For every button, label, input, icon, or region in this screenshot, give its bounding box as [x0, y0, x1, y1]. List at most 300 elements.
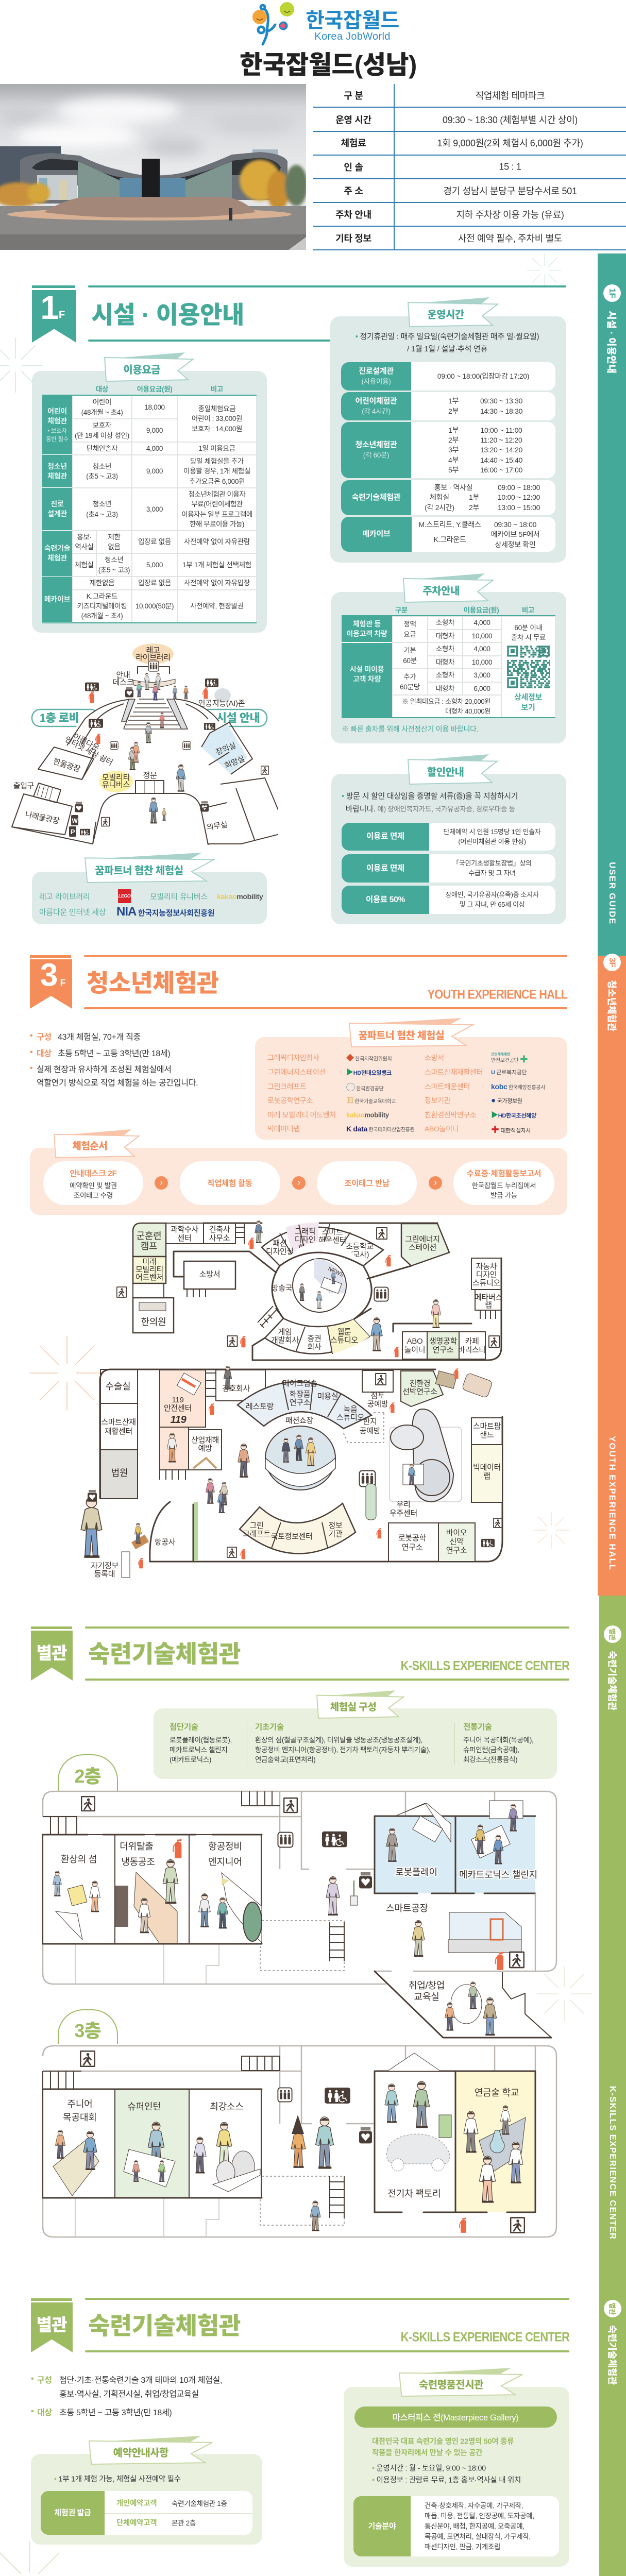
room: 자동차 디자인 스튜디오: 디자인: [476, 1270, 497, 1279]
panel: 운영시간 (hours): [330, 297, 566, 563]
logo: LEGO: [118, 889, 131, 903]
fan rooms: top arc: 회사: [298, 1244, 312, 1252]
partner list: 미래 모빌리티 어드벤처: [267, 1111, 336, 1119]
text block: youth hall overview: 초등 5학년 ~ 고등 3학년(만 18세): [58, 1049, 170, 1058]
fee table: 사전예약 없이 자유입장: [184, 579, 250, 587]
column: 첨단기술: 로봇플레이(협동로봇),: [170, 1736, 232, 1744]
room: 더위탈출 냉동공조: [115, 1835, 189, 1944]
panel: 운영시간 (hours): 메카이브 5F에서: [491, 530, 539, 538]
floor map: 3F lower wing: [80, 1366, 503, 1579]
panel: 운영시간 (hours): 16:00 ~ 17:00: [480, 466, 522, 474]
panel: 운영시간 (hours): 09:30 ~ 13:30: [480, 397, 522, 405]
partner list: 정보기관: [425, 1096, 450, 1105]
column: 기초기술: [255, 1723, 431, 1764]
room: 항공정비 엔지니어: 항공정비: [208, 1841, 242, 1852]
partner list: 산업재해예방: [491, 1053, 510, 1056]
parking table: 정액: [403, 620, 416, 628]
row: 청소년체험관: [341, 422, 555, 478]
english subtitle: K-SKILLS EXPERIENCE CENTER: [400, 2330, 569, 2344]
row: 숙련기술체험관: 숙련기술체험관: [352, 493, 400, 502]
ribbon badge: 3F: F: [60, 978, 65, 988]
section title: 숙련기술체험관: [88, 2312, 241, 2339]
rooms: 스마트팜랜드 and 빅데이터랩: 랜드: [480, 1431, 494, 1439]
icons: [81, 1797, 347, 1848]
panel: 예약안내사항: [31, 2436, 262, 2545]
rooms: bottom right: [402, 1332, 486, 1359]
fee table: 청소년: [105, 556, 124, 564]
fee table: 단체인솔자: [87, 445, 117, 452]
panel: 꿈파트너 협찬 체험실 (1F): [32, 853, 267, 924]
fan rooms: bottom arc: 게임: [278, 1328, 292, 1336]
room: 119 안전센터: 119: [172, 1396, 184, 1404]
rooms: bottom right: 놀이터: [404, 1346, 425, 1354]
rooms: 전기차 팩토리 and 연금술 학교: [375, 2053, 535, 2212]
rooms: bottom right: 카페: [465, 1337, 479, 1346]
step 4: 한국잡월드 누리집에서: [472, 1182, 536, 1190]
sidebar: 1F user guide tab: 1F: [607, 288, 617, 298]
panel: 운영시간 (hours): 체험실: [430, 493, 449, 501]
fee table: 4,000: [146, 445, 163, 452]
text block: youth hall overview: •: [30, 1031, 32, 1040]
panel: 예약안내사항: 본관 2층: [172, 2519, 196, 2527]
box: 기술분야: [353, 2496, 559, 2556]
room: 환상의 섬: 환상의 섬: [61, 1854, 97, 1865]
fee table: 역사실: [75, 543, 94, 551]
ticket table: [41, 2491, 252, 2535]
parking table: 10,000: [472, 632, 492, 640]
room: 건축사사무소: 건축사: [209, 1225, 230, 1234]
stairs: [43, 2056, 280, 2089]
info table: 경기 성남시 분당구 분당수서로 501: [443, 186, 577, 196]
english subtitle: K-SKILLS EXPERIENCE CENTER: [400, 1659, 569, 1673]
panel: 운영시간 (hours): 10:00 ~ 12:00: [498, 493, 540, 501]
panel: 숙련명품전시관: 대한민국 대표 숙련기술 명인 22명의 50여 종류: [372, 2438, 514, 2446]
panel: 주차안내 (parking): 구분: [395, 606, 408, 614]
info table: 체험료: [341, 138, 366, 148]
information desk: 데스크: [113, 678, 133, 687]
fee table: 홍보·: [77, 533, 92, 541]
ribbon heading: 이용요금: [104, 352, 195, 382]
room: 항공정비 엔지니어: [189, 1835, 262, 1944]
panel: 숙련명품전시관: [344, 2368, 569, 2567]
outer walls: [100, 1369, 502, 1562]
fan rooms: bottom arc: 개발회사: [271, 1336, 299, 1345]
row: 청소년체험관: (각 60분): [363, 451, 389, 459]
partner list: 소방서: [425, 1054, 444, 1062]
column: 기초기술: 기초기술: [255, 1723, 284, 1732]
fee table: 청소년체험관 이용자: [189, 490, 245, 498]
room: 취업/창업 교육실: 교육실: [414, 1992, 439, 2002]
info table: 1회 9,000원(2회 체험시 6,000원 추가): [437, 138, 583, 148]
panel: 운영시간 (hours): 13:00 ~ 15:00: [498, 503, 540, 512]
building outline: [43, 1791, 556, 1984]
row: 청소년체험관: 청소년체험관: [355, 440, 397, 449]
text block: annex overview: 대상: [37, 2409, 52, 2417]
room: 건축사사무소: [204, 1223, 235, 1244]
rooms: 로봇플레이 and 메카트로닉스 챌린지: 로봇플레이: [395, 1867, 437, 1877]
info table: 기타 정보: [335, 233, 371, 244]
fee table: 10,000(50분): [136, 602, 174, 610]
entrance: 정문: [136, 771, 164, 793]
parking table: 시설 미이용: [350, 665, 384, 673]
fee table: 9,000: [146, 427, 163, 434]
fan rooms: top arc: (교사): [350, 1250, 369, 1259]
room: 스마트산재 재활센터: 스마트산재: [101, 1418, 136, 1427]
panel: 운영시간 (hours): 2부: [448, 436, 459, 444]
panel: 운영시간 (hours): (각 2시간): [425, 503, 454, 512]
text block: youth hall overview: 43개 체험실, 70+개 직종: [58, 1033, 141, 1042]
dashed room: [260, 2176, 344, 2231]
partner list: 친환경선박연구소: [425, 1111, 477, 1119]
panel: 숙련명품전시관: • 운영시간 : 월 - 토요일, 9:00 ~ 18:00: [372, 2465, 486, 2473]
label: 시설 안내: [200, 709, 267, 726]
parking table: 소형차: [436, 671, 454, 679]
text block: annex overview: 홍보·역사실, 기획전시실, 취업/창업교육실: [59, 2390, 199, 2399]
icons: facilities: [69, 661, 268, 837]
text block: youth hall overview: 대상: [37, 1049, 52, 1058]
room: 한울광장: [38, 747, 94, 779]
section title: 청소년체험관: [87, 970, 218, 996]
pill: Masterpiece Gallery: [354, 2406, 557, 2428]
room: 과학수사센터: [166, 1223, 204, 1244]
fee table: 체험관: [47, 554, 67, 562]
QR code: [507, 646, 550, 688]
room: 취업/창업 교육실: 취업/창업: [409, 1980, 445, 1991]
panel: 운영시간 (hours): 운영시간: [427, 310, 464, 321]
orange circle: 레고 라이브러리: [132, 643, 174, 664]
room: 경호회사: [216, 1366, 265, 1401]
parking table: ※ 일최대요금 : 소형차 20,000원: [402, 698, 490, 705]
fee table: 제한: [108, 533, 121, 541]
panel: 운영시간 (hours): 5부: [448, 466, 459, 474]
panel: 주차안내 (parking): 이용요금(원): [464, 606, 499, 614]
closed days note: [356, 332, 539, 353]
fee table: 보호자: [93, 421, 111, 429]
panel: 숙련명품전시관: 숙련명품전시관: [419, 2380, 483, 2391]
room: 주니어 목공대회: 목공대회: [63, 2112, 97, 2123]
section title: 숙련기술체험관: [88, 1640, 241, 1667]
fan rooms: 메이크업숍: [282, 1379, 317, 1388]
partner list: 그래픽디자인회사: [267, 1054, 319, 1062]
info table: 직업체험 테마파크: [476, 91, 545, 101]
center: 패션쇼장: [265, 1416, 335, 1490]
tab: 3층: [58, 2009, 118, 2044]
center: 방송국: NEWS: [327, 1266, 345, 1278]
fee table: 키즈디지털메이킹: [77, 602, 127, 610]
fan rooms: top arc: [262, 1223, 383, 1266]
fee table: 무료(어린이체험관: [191, 500, 243, 508]
step 4: [453, 1161, 554, 1205]
fan rooms: top arc: 해운센터: [318, 1236, 346, 1245]
fee table: 어린이: [93, 398, 111, 406]
fee table: 한해 무료이용 가능): [190, 520, 244, 528]
parking table: 4,000: [473, 645, 490, 653]
parking table: 6,000: [473, 685, 490, 692]
row: 이용료 면제 (2): 이용료 면제: [366, 863, 404, 873]
panel: 예약안내사항: 단체예약고객: [116, 2519, 157, 2528]
panel: 운영시간 (hours): 10:00 ~ 11:00: [480, 426, 522, 434]
lounge person: [326, 1872, 372, 1916]
room: 수술실: [100, 1369, 138, 1403]
room: 119 안전센터: [160, 1370, 206, 1427]
icons: [88, 1368, 502, 1568]
room: 과학수사센터: 센터: [177, 1234, 192, 1243]
row: 진로설계관: [341, 362, 555, 391]
rooms: 점토공예방 and 한지공예방: 한지: [363, 1417, 377, 1426]
room: 한의원: 한의원: [141, 1317, 166, 1327]
fee table: 제한없음: [90, 579, 114, 587]
step 1: 안내데스크 2F: [70, 1170, 117, 1178]
english subtitle: YOUTH EXPERIENCE HALL: [427, 987, 567, 1002]
section header: 별관 숙련기술체험관 (2): [31, 2298, 570, 2352]
center: 방송국: [272, 1242, 371, 1331]
panel: 할인안내 (discounts): (어린이체험관 이용 한정): [458, 838, 526, 845]
parking table: 대형차: [436, 685, 454, 692]
fee table: (초4 ~ 고3): [86, 510, 118, 518]
space center: 우리: [396, 1500, 411, 1509]
label: 1층 로비: [32, 709, 99, 726]
panel: 운영시간 (hours): 1부: [448, 397, 459, 405]
fan rooms: [238, 1379, 371, 1429]
fee table: 18,000: [144, 403, 165, 411]
panel: 운영시간 (hours): M.스트리트, Y.클래스: [418, 520, 481, 529]
row: 진로설계관: (자유이용): [362, 377, 391, 385]
fee table: 3,000: [146, 505, 163, 513]
room: 한의원: [133, 1283, 174, 1333]
sidebar: 1F user guide tab: 시설 · 이용안내: [606, 311, 616, 374]
room: 더위탈출 냉동공조: 냉동공조: [121, 1857, 155, 1867]
panel: 꿈파트너 협찬 체험실 (1F): 모빌리티 유니버스: [150, 892, 208, 902]
sidebar: 3F youth hall tab: [598, 956, 626, 1596]
step 4: 발급 가능: [490, 1192, 517, 1199]
rooms: bottom right: 생명공학: [429, 1337, 457, 1346]
panel: 할인안내 (discounts): 및 그 자녀, 만 65세 이상: [459, 901, 525, 908]
panel: 주차안내 (parking): 비고: [522, 606, 534, 614]
text block: annex overview: [31, 2375, 222, 2417]
column: 첨단기술: 첨단기술: [170, 1723, 198, 1732]
fee table: 체험실: [75, 561, 94, 569]
step 3: [317, 1161, 417, 1205]
panel: 주차안내 (parking): [331, 573, 566, 743]
panel: 할인안내 (discounts): 수급자 및 그 자녀: [468, 869, 516, 877]
circle: 모빌리티 유니버스: 유니버스: [102, 781, 130, 789]
center: 패션쇼장: 패션쇼장: [285, 1416, 313, 1425]
fee table: 종일체험요금: [198, 405, 235, 413]
partner list: ◯ 한국환경공단: [346, 1083, 384, 1092]
lower fan rooms: 정보: [328, 1521, 343, 1530]
logo: Korea JobWorld: 한국잡월드: [306, 9, 399, 32]
room: 더위탈출 냉동공조: 더위탈출: [120, 1841, 154, 1852]
info table: 09:30 ~ 18:30 (체험부별 시간 상이): [443, 115, 578, 125]
ribbon badge: 3F: [30, 959, 72, 1009]
room: 119 안전센터: 119: [170, 1414, 187, 1426]
room: 군훈련캠프: 캠프: [141, 1241, 157, 1251]
room: 과학수사센터: 과학수사: [171, 1225, 198, 1234]
room: 수술실: 수술실: [105, 1381, 131, 1392]
panel: 이용요금 (fees): 대상: [96, 385, 108, 393]
room: 산업재해예방: 예방: [198, 1444, 212, 1453]
panel: 숙련명품전시관: 통신분야, 배첩, 한지공예, 오죽공예,: [425, 2522, 525, 2530]
orange circle: 레고 라이브러리: 라이브러리: [136, 653, 171, 662]
fee table: 사전예약, 현장발권: [190, 602, 244, 610]
rooms: bottom right: 연구소: [433, 1346, 454, 1354]
left corridor: 항공사: [81, 1490, 226, 1579]
step 1: 조이태그 수령: [74, 1192, 113, 1199]
tab: 2층: 2층: [74, 1766, 101, 1787]
lower fan rooms: 크래프트: [243, 1530, 270, 1538]
logo: LEGO: LEGO: [119, 893, 130, 899]
panel: 꿈파트너 협찬 체험실 (1F): 아름다운 인터넷 세상: [39, 908, 106, 917]
left corridor: 항공사: 등록대: [94, 1570, 115, 1579]
fee table: 입장료 없음: [138, 579, 171, 587]
text block: youth hall overview: [30, 1031, 198, 1088]
left corridor: 항공사: 항공사: [155, 1538, 176, 1547]
logo: NIA: NIA 한국지능정보사회진흥원: [116, 905, 214, 919]
rooms: 점토공예방 and 한지공예방: [343, 1370, 393, 1443]
fee table: 체험관: [47, 417, 67, 425]
room: 아름다운 인터넷 세상 쉼터: 아름다운: [72, 732, 100, 753]
room: 슈퍼인턴: [115, 2089, 189, 2198]
room: 취업/창업 교육실: [375, 1971, 551, 2038]
row: 메카이브: 메카이브: [362, 530, 391, 538]
room: 자동차 디자인 스튜디오: 스튜디오: [472, 1279, 500, 1287]
column: 기초기술: 항공정비 엔지니어(항공정비), 전기차 팩토리(자동차 뿌리기술),: [255, 1746, 431, 1754]
step 2: 직업체험 활동: [207, 1179, 252, 1188]
entrance: 출입구: [13, 782, 61, 803]
fan rooms: bottom arc: 증권: [307, 1334, 322, 1343]
logo: kakaomobility: kakaomobility: [217, 892, 263, 901]
partner list: 안전보건공단 ✚: [491, 1055, 528, 1064]
parking table: 추가: [403, 673, 416, 681]
tab: 3층: 3층: [74, 2020, 101, 2041]
room: 미래 모빌리티 어드벤처: 어드벤처: [136, 1273, 163, 1282]
parking table: [342, 615, 555, 718]
fee table: 진로: [50, 500, 64, 508]
section title: 시설 · 이용안내: [91, 301, 244, 329]
section header: 3F 청소년체험관: [30, 955, 568, 1009]
parking table: 대형차: [436, 658, 454, 666]
panel: 숙련명품전시관: 매듭, 미용, 전통탈, 인장공예, 도자공예,: [425, 2512, 534, 2520]
room: 그린에너지 스테이션: [401, 1224, 449, 1266]
panel: 꿈파트너 협찬 체험실 (3F): 꿈파트너 협찬 체험실: [358, 1030, 444, 1041]
room: 나래울광장: 나래울광장: [24, 810, 60, 826]
step 3: 조이태그 반납: [344, 1179, 390, 1188]
rooms: 스마트팜랜드 and 빅데이터랩: [471, 1418, 502, 1502]
fee table: 메카이브: [44, 595, 70, 603]
column: 첨단기술: [170, 1723, 232, 1764]
sidebar: annex K-skills tab: 숙련기술체험관: [607, 1651, 617, 1710]
column: 첨단기술: 메카트로닉스 챌린지: [170, 1746, 228, 1754]
fan rooms: 미용실: [317, 1392, 338, 1401]
panel: 숙련명품전시관: 작품을 한자리에서 만날 수 있는 공간: [372, 2449, 482, 2458]
ribbon badge: 1F: F: [59, 309, 65, 320]
panel: 운영시간 (hours): 2부: [448, 407, 459, 415]
step 2: [180, 1161, 280, 1205]
parking table: 60분당: [400, 683, 420, 690]
panel: 운영시간 (hours): 2부: [469, 503, 479, 512]
partner list: ▥ 한국기술교육대학교: [346, 1096, 396, 1105]
rooms: 창의실 and 희망실: [201, 722, 252, 774]
stairs: [160, 1373, 216, 1480]
rooms: 로봇공학연구소 and 바이오신약연구소: 연구소: [446, 1546, 467, 1555]
rooms: 스마트팜랜드 and 빅데이터랩: 랩: [483, 1472, 490, 1481]
room: 미래 모빌리티 어드벤처: 모빌리티: [136, 1265, 163, 1274]
text block: youth hall overview: •: [30, 1064, 32, 1073]
column: 전통기술: 슈퍼인턴(금속공예),: [463, 1746, 519, 1754]
row: 숙련기술체험관: [341, 480, 555, 515]
fan rooms: 연구소: [290, 1398, 311, 1407]
sidebar: annex K-skills tab: [599, 1596, 626, 2576]
parking table: 3,000: [473, 671, 490, 679]
entrance: 정문: 정문: [143, 771, 157, 780]
fan rooms: top arc: 스마트: [322, 1228, 343, 1236]
rooms: bottom right: 바리스타: [458, 1346, 486, 1354]
panel: 운영시간 (hours): 09:00 ~ 18:00(입장마감 17:20): [437, 372, 529, 380]
icons: [80, 2051, 525, 2233]
panel: 운영시간 (hours): 1부: [469, 493, 479, 501]
info table: 구 분: [344, 91, 363, 101]
room: 건축사사무소: 사무소: [209, 1234, 230, 1243]
ticket table: 체험권 발급: [54, 2508, 91, 2517]
row: 이용료 면제: [342, 823, 555, 851]
panel: 숙련명품전시관: 건축·창호제작, 자수공예, 가구제작,: [425, 2502, 523, 2510]
parking table: 60분: [403, 656, 417, 665]
floor map: annex 3F: [42, 2045, 557, 2238]
partner list: 빅데이터랩: [267, 1125, 300, 1133]
panel: 예약안내사항: 예약안내사항: [113, 2448, 168, 2459]
parking table: 10,000: [472, 658, 492, 666]
room: 나래울광장: [12, 794, 96, 844]
hall thick walls: [43, 2089, 262, 2198]
room: 소방서: 소방서: [199, 1270, 220, 1279]
rooms: 로봇플레이 and 메카트로닉스 챌린지: [375, 1801, 537, 1893]
sidebar: annex K-skills tab: K-SKILLS EXPERIENCE CENTER: [608, 2086, 618, 2240]
rooms: 로봇공학연구소 and 바이오신약연구소: 연구소: [402, 1543, 423, 1552]
column: 전통기술: 주니어 목공대회(목공예),: [463, 1736, 534, 1744]
label: 시설 안내: 시설 안내: [216, 711, 260, 724]
panel: 이용요금 (fees): 비고: [211, 385, 223, 393]
pill: Masterpiece Gallery: 마스터피스 전(Masterpiece Gallery): [393, 2413, 518, 2422]
ribbon badge: 별관: [31, 2302, 73, 2352]
fan rooms: top arc: 디자인: [295, 1235, 315, 1244]
row: 이용료 50%: 이용료 50%: [366, 895, 405, 904]
room: 최강소스: 최강소스: [210, 2102, 244, 2112]
panel: 운영시간 (hours): 3부: [448, 446, 459, 454]
building outline: [43, 2046, 556, 2237]
room: 인공지능(AI)존: [198, 688, 245, 708]
step 1: [43, 1161, 143, 1205]
room: 주니어 목공대회: [43, 2089, 115, 2198]
tab: 2층: [58, 1754, 118, 1791]
ribbon badge: 별관: 별관: [37, 1643, 66, 1663]
column: 첨단기술: (메카트로닉스): [170, 1756, 211, 1764]
fee table: (만 19세 이상 성인): [75, 432, 129, 439]
row: 이용료 면제 (2): [342, 854, 555, 883]
panel: 운영시간 (hours): 1부: [448, 426, 459, 434]
room: 산업재해예방: 산업재해: [191, 1436, 219, 1445]
floor map: annex 2F: [42, 1791, 557, 2038]
row: 어린이체험관: [341, 392, 555, 420]
ribbon badge: 1F: [32, 290, 76, 343]
parking table: 4,000: [473, 619, 490, 626]
fan rooms: 녹음: [343, 1405, 358, 1414]
panel: 이용요금 (fees): 이용요금(원): [137, 385, 172, 393]
panel: 체험실 구성: 체험실 구성: [330, 1702, 376, 1713]
text block: youth hall overview: •: [30, 1048, 32, 1057]
fan rooms: top arc: 초등학교: [346, 1242, 374, 1251]
room: 항공정비 엔지니어: 엔지니어: [208, 1857, 242, 1867]
arrow 1: ›: [160, 1177, 163, 1188]
